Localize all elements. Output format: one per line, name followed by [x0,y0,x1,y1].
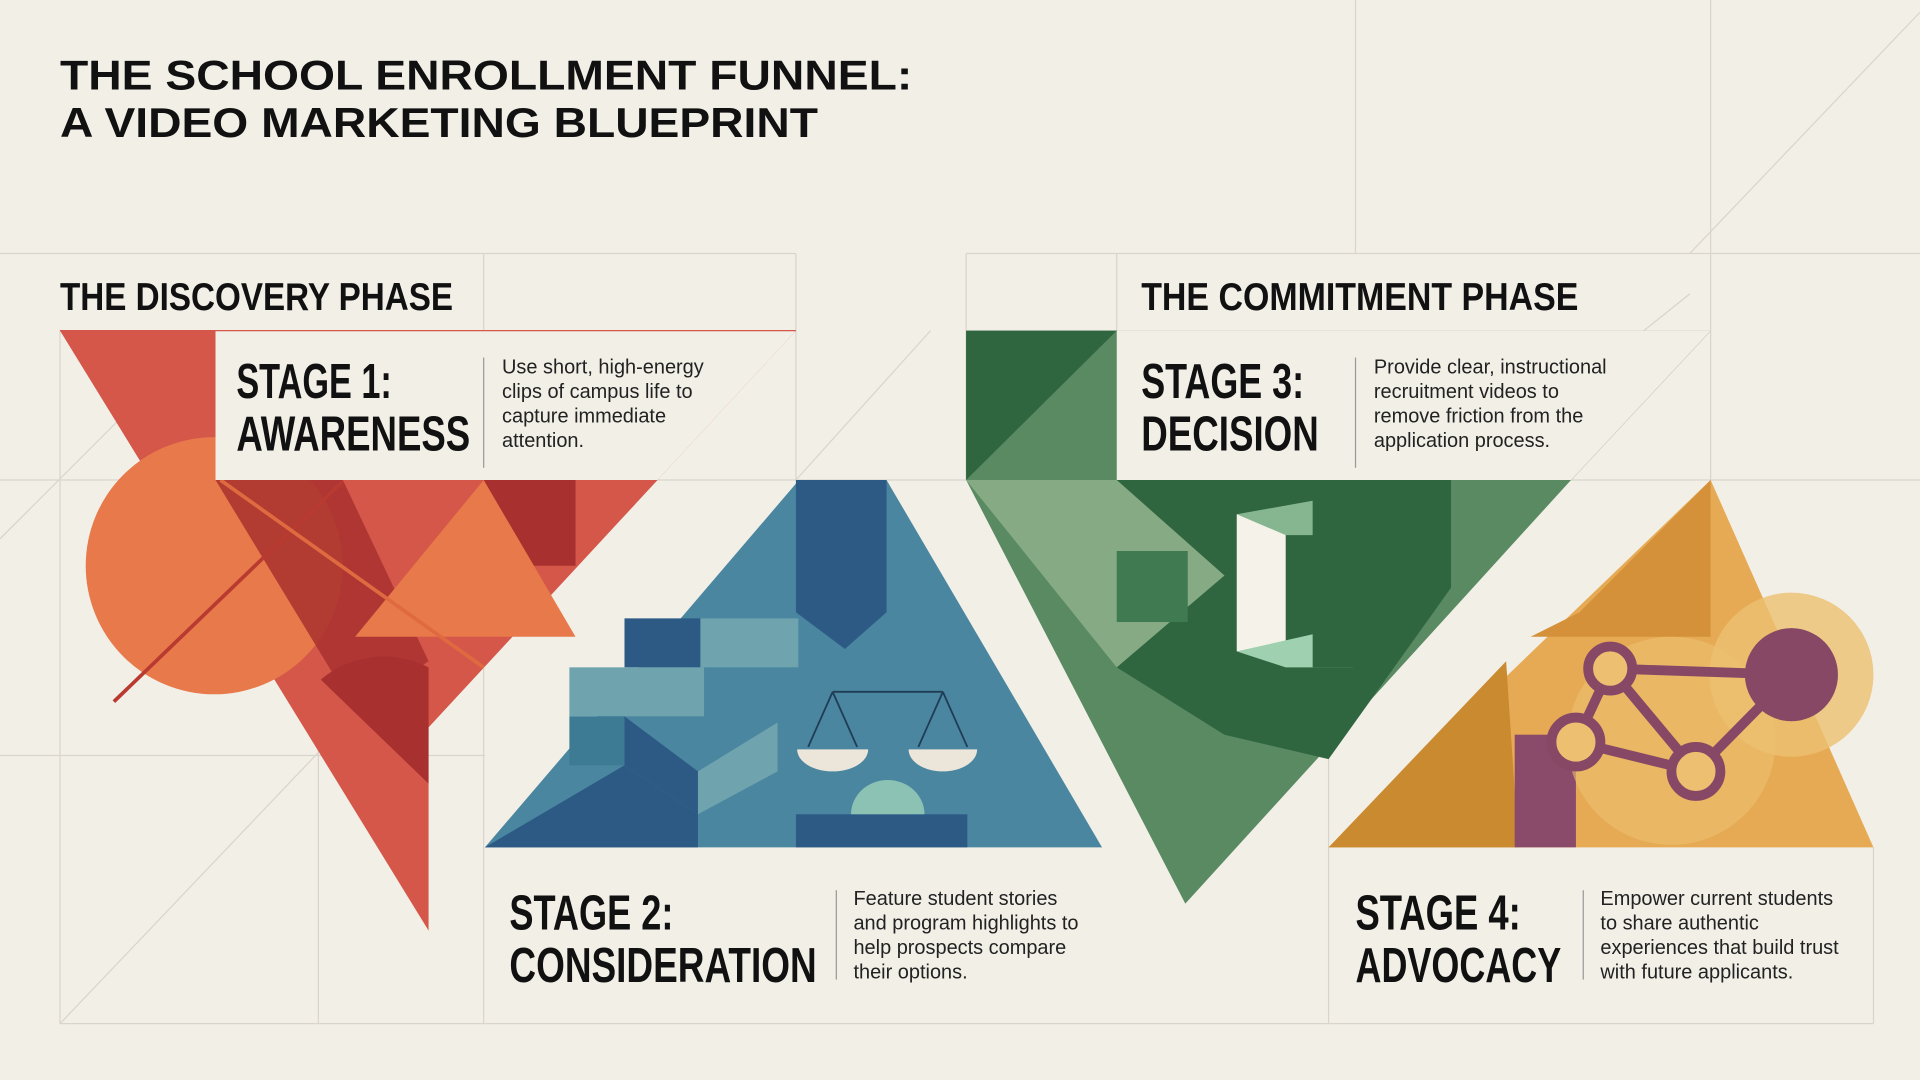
text box: stage 4 [1356,886,1839,993]
text box: stage 3: recruitment videos to [1374,381,1559,403]
text box: stage 1: attention. [502,430,584,452]
text box: stage 2: Feature student stories [853,888,1057,910]
text box: stage 3: STAGE 3: [1141,355,1304,409]
text box: stage 3: Provide clear, instructional [1374,356,1607,378]
title [60,51,912,146]
heading: discovery phase: THE DISCOVERY PHASE [60,276,453,319]
text box: stage 4: to share authentic [1600,912,1759,934]
text box: stage 1: clips of campus life to [502,381,693,403]
heading: commitment phase: THE COMMITMENT PHASE [1141,276,1578,319]
graphic: green decision funnel [966,331,1711,904]
text box: stage 1: STAGE 1: [236,355,392,409]
title: THE SCHOOL ENROLLMENT FUNNEL: [60,51,912,98]
text box: stage 2: and program highlights to [853,912,1078,934]
text box: stage 2: help prospects compare [853,937,1066,959]
text box: stage 1: AWARENESS [236,408,470,462]
text box: stage 4: experiences that build trust [1600,937,1839,959]
text box: stage 1 [60,331,796,480]
text box: stage 2: CONSIDERATION [509,939,817,993]
text box: stage 4: Empower current students [1600,888,1833,910]
text box: stage 4: with future applicants. [1599,961,1793,983]
text box: stage 2: their options. [853,961,968,983]
text box: stage 3 [1117,331,1711,480]
graphic: red awareness funnel [60,331,796,931]
title: A VIDEO MARKETING BLUEPRINT [60,99,818,146]
text box: stage 3: DECISION [1141,408,1319,462]
text box: stage 4: STAGE 4: [1356,886,1521,940]
text box: stage 1: capture immediate [502,405,666,427]
text box: stage 3: application process. [1374,430,1550,452]
graphic: orange advocacy triangle [1329,480,1873,847]
text box: stage 2 [509,886,1078,993]
text box: stage 1: Use short, high-energy [502,356,704,378]
text box: stage 4: ADVOCACY [1356,939,1561,993]
text box: stage 2: STAGE 2: [509,886,673,940]
graphic: blue consideration pyramid [485,480,1102,847]
text box: stage 3: remove friction from the [1374,405,1583,427]
